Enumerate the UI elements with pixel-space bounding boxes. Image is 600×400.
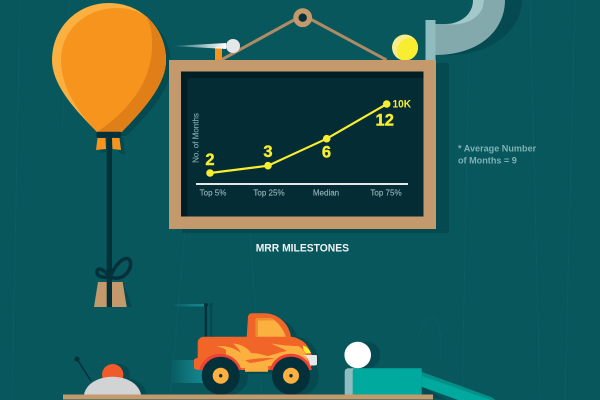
ramp shadow — [421, 386, 446, 400]
footnote: of Months = 9 — [458, 156, 517, 166]
block — [353, 368, 422, 394]
line chart — [192, 99, 411, 198]
ball shadow — [354, 342, 380, 368]
balloon — [52, 3, 171, 155]
10K label: 10K — [392, 99, 411, 111]
balloon string and weight — [94, 134, 132, 307]
data points — [206, 100, 391, 177]
category labels: Top 25% — [253, 188, 285, 198]
truck body — [194, 313, 312, 370]
y axis label: No. of Months — [192, 113, 200, 163]
board shadow — [182, 63, 449, 233]
rear wheel arch — [270, 354, 312, 370]
rear wheel — [272, 357, 310, 395]
category labels — [200, 188, 402, 198]
remote shadow — [108, 364, 130, 385]
front wheel arch — [199, 354, 242, 370]
chalkboard frame — [169, 60, 436, 229]
ramp — [422, 372, 495, 400]
value labels: 12 — [376, 112, 394, 130]
chart title: MRR MILESTONES — [256, 242, 349, 254]
axis line — [196, 183, 408, 185]
headlight — [303, 346, 311, 354]
flames — [216, 344, 309, 372]
bumper — [304, 355, 317, 366]
remote control — [74, 356, 147, 394]
value labels: 6 — [322, 144, 331, 162]
category labels: Top 5% — [200, 188, 226, 198]
hanging strings — [221, 15, 386, 60]
category labels: Median — [313, 188, 339, 198]
pipe — [426, 0, 522, 60]
category labels: Top 75% — [370, 188, 402, 198]
yellow ball — [392, 34, 418, 60]
window — [256, 318, 286, 337]
footnote: * Average Number — [458, 144, 537, 154]
front wheel — [202, 357, 240, 395]
table — [63, 394, 433, 400]
toy truck — [194, 303, 319, 395]
truck shadow — [230, 316, 319, 374]
value labels — [205, 112, 394, 169]
light post — [345, 368, 356, 394]
value labels: 2 — [205, 151, 215, 169]
orange peg — [215, 47, 222, 60]
antenna — [77, 359, 91, 381]
white ball with motion tail — [173, 39, 240, 53]
button — [102, 364, 123, 385]
data line — [210, 104, 387, 173]
flame streak — [245, 358, 275, 363]
white ball — [344, 342, 371, 368]
launcher with ball and ramp — [344, 342, 495, 400]
motion trails — [170, 304, 206, 383]
dome — [84, 377, 141, 394]
hanging ring — [296, 11, 310, 24]
truck antennas — [210, 305, 212, 338]
value labels: 3 — [263, 143, 273, 161]
